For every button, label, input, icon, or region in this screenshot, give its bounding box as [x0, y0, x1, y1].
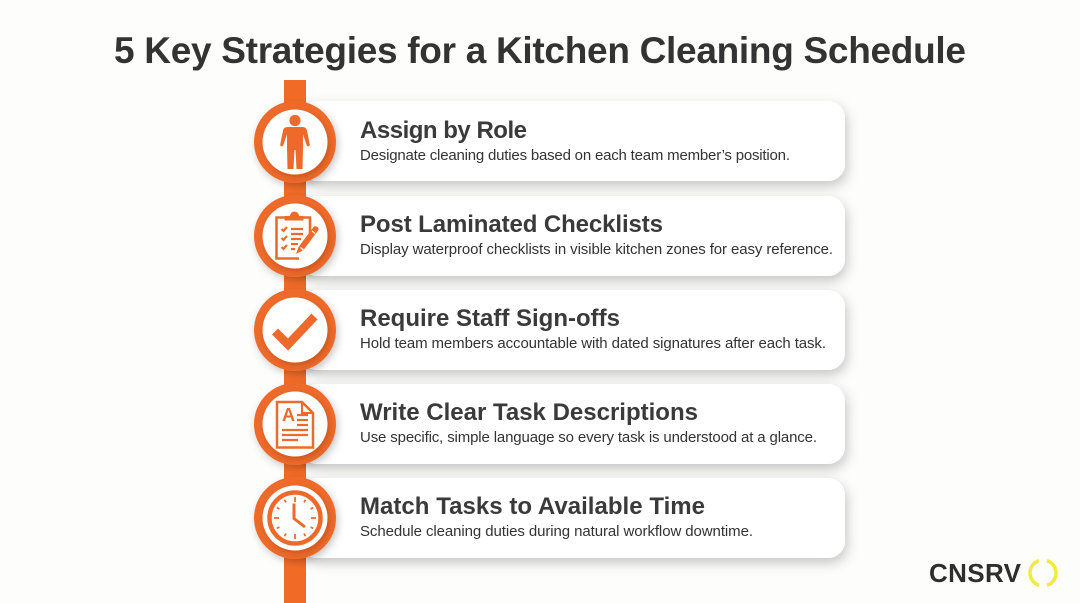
panel: assign by role	[254, 101, 845, 183]
panel: post laminated checklists	[254, 195, 845, 277]
node disc	[262, 298, 328, 362]
card	[300, 101, 845, 181]
node disc	[262, 110, 328, 174]
title: 5 Key Strategies for a Kitchen Cleaning Schedule	[114, 30, 966, 71]
card	[300, 478, 845, 558]
heading: Write Clear Task Descriptions	[360, 399, 698, 426]
heading: Assign by Role	[360, 117, 527, 144]
node ring	[254, 289, 336, 371]
node ring	[254, 477, 336, 559]
logo: CNSRV	[929, 558, 1056, 588]
icon: check mark	[275, 316, 314, 344]
node disc	[262, 204, 328, 268]
card	[300, 196, 845, 276]
logo ring	[1030, 561, 1056, 585]
icon: clipboard with pen	[276, 212, 319, 258]
node ring	[254, 101, 336, 183]
node disc	[262, 486, 328, 550]
node disc	[262, 392, 328, 456]
icon: person	[280, 115, 310, 169]
panel: match tasks to available time	[254, 477, 845, 559]
icon: clock	[270, 492, 320, 544]
description: Display waterproof checklists in visible kitchen zones for easy reference.	[360, 241, 833, 258]
description: Schedule cleaning duties during natural workflow downtime.	[360, 523, 753, 540]
logo wordmark: CNSRV	[929, 558, 1022, 588]
heading: Require Staff Sign-offs	[360, 305, 620, 332]
node ring	[254, 383, 336, 465]
card	[300, 384, 845, 464]
description: Use specific, simple language so every task is understood at a glance.	[360, 429, 817, 446]
node ring	[254, 195, 336, 277]
description: Hold team members accountable with dated signatures after each task.	[360, 335, 826, 352]
panel: write clear task descriptions	[254, 383, 845, 465]
card	[300, 290, 845, 370]
timeline spine	[284, 80, 306, 603]
heading: Post Laminated Checklists	[360, 211, 663, 238]
icon: document: A	[282, 405, 295, 425]
panel: require staff sign-offs	[254, 289, 845, 371]
description: Designate cleaning duties based on each team member’s position.	[360, 147, 790, 164]
icon: document	[277, 402, 313, 448]
heading: Match Tasks to Available Time	[360, 493, 705, 520]
